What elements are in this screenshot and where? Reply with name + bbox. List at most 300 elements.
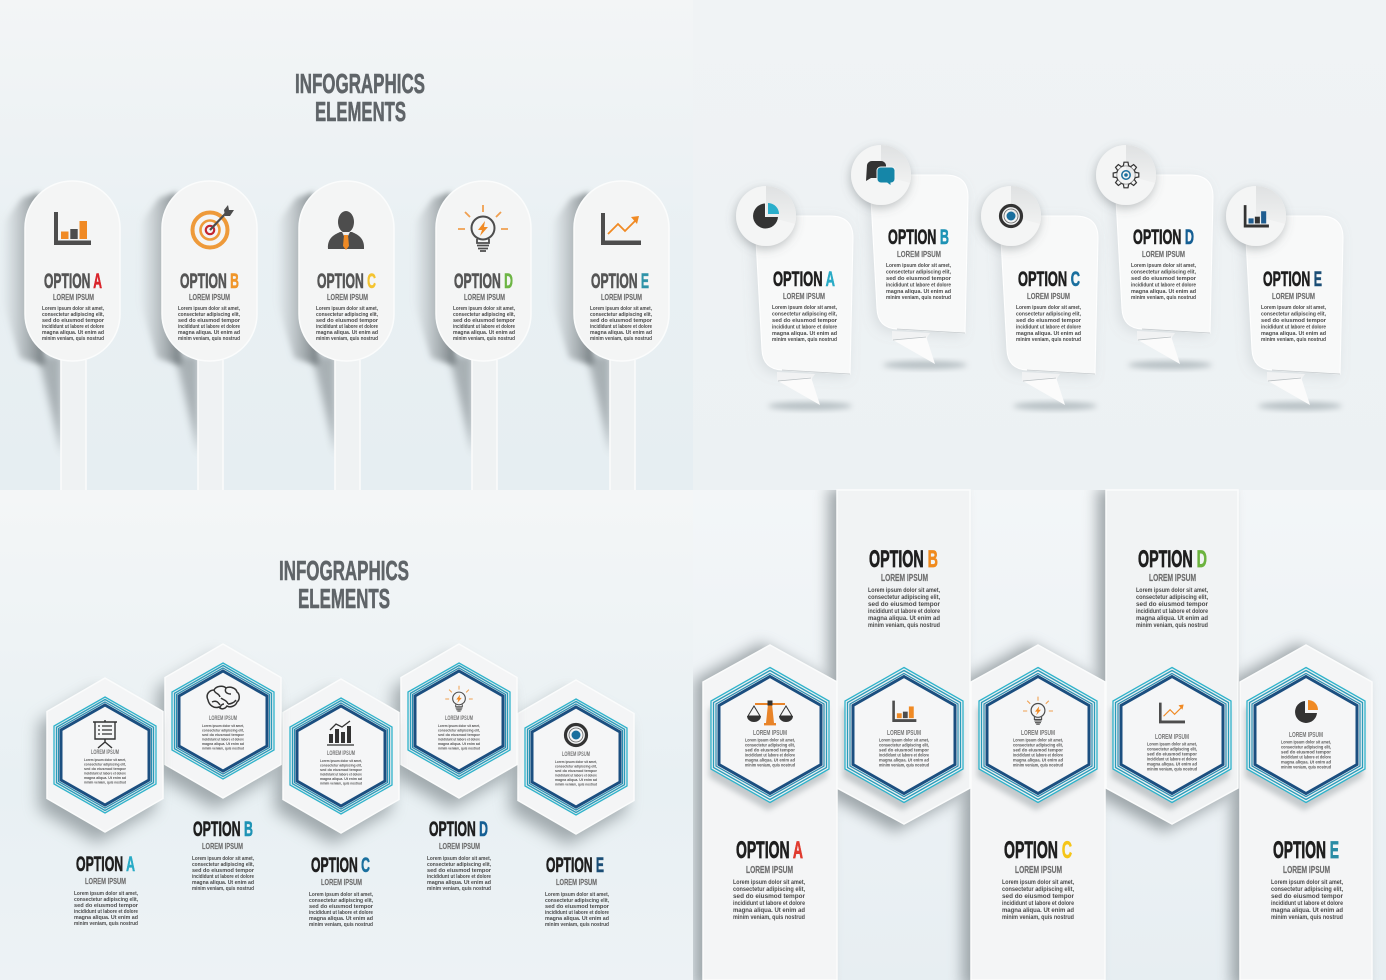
- text block: option B: LOREM IPSUM: [881, 573, 928, 584]
- card: option C: [981, 186, 1098, 410]
- text block: option C: incididunt ut labore et dolore: [1002, 900, 1074, 907]
- subheading: LOREM IPSUM: [556, 877, 597, 887]
- body text: [178, 306, 241, 342]
- inner body text: sed do eiusmod tempor: [879, 748, 929, 752]
- body text: Lorem ipsum dolor sit amet,: [427, 856, 491, 862]
- text block: option A: incididunt ut labore et dolore: [733, 900, 805, 907]
- body text: minim veniam, quis nostrud: [42, 336, 104, 342]
- body text: magna aliqua. Ut enim ad: [178, 330, 241, 336]
- card: option A: [736, 186, 853, 410]
- text block: option B: consectetur adipiscing elit,: [868, 594, 940, 601]
- inner body text: consectetur adipiscing elit,: [1281, 744, 1331, 750]
- body text: incididunt ut labore et dolore: [1016, 324, 1081, 330]
- text block: option C: sed do eiusmod tempor: [1002, 893, 1075, 900]
- hexagon: option D: [1111, 668, 1231, 810]
- text block: option A: LOREM IPSUM: [746, 865, 793, 876]
- inner label: LOREM IPSUM: [209, 715, 237, 722]
- title: ELEMENTS: [315, 96, 406, 127]
- subheading: LOREM IPSUM: [1027, 291, 1070, 301]
- body text: minim veniam, quis nostrud: [309, 922, 373, 928]
- body text: magna aliqua. Ut enim ad: [427, 880, 492, 886]
- body text: magna aliqua. Ut enim ad: [74, 915, 139, 921]
- heading: option A: OPTION A: [44, 270, 102, 293]
- pill: option C: [276, 181, 394, 490]
- panel background: [0, 0, 693, 490]
- pill: option D: [413, 181, 531, 490]
- text block: option B: OPTION B: [869, 546, 938, 573]
- body text: consectetur adipiscing elit,: [772, 312, 837, 318]
- body text: magna aliqua. Ut enim ad: [1131, 289, 1197, 295]
- icon: light bulb: [445, 686, 473, 711]
- inner body text: consectetur adipiscing elit,: [320, 762, 362, 768]
- body text: incididunt ut labore et dolore: [74, 909, 138, 915]
- body text: consectetur adipiscing elit,: [453, 312, 515, 318]
- inner body text: consectetur adipiscing elit,: [84, 762, 126, 766]
- text block: option A: Lorem ipsum dolor sit amet,: [733, 879, 805, 886]
- body text: minim veniam, quis nostrud: [545, 922, 609, 928]
- inner body text: minim veniam, quis nostrud: [555, 782, 598, 786]
- body text: incididunt ut labore et dolore: [1131, 282, 1196, 288]
- heading: option A: OPTION A: [773, 268, 835, 291]
- body text: sed do eiusmod tempor: [309, 904, 374, 910]
- icon: bar chart: [54, 212, 91, 245]
- hexagon: option E: [510, 680, 634, 928]
- inner body text: incididunt ut labore et dolore: [879, 752, 929, 758]
- heading: option C: OPTION C: [317, 270, 376, 293]
- body text: incididunt ut labore et dolore: [192, 874, 254, 880]
- icon disc: rings: [981, 186, 1041, 246]
- text block: option B: [868, 546, 941, 629]
- hexagon: option C: [275, 679, 399, 928]
- heading: option C: OPTION C: [311, 854, 370, 877]
- body text: Lorem ipsum dolor sit amet,: [772, 305, 837, 311]
- body text: magna aliqua. Ut enim ad: [316, 330, 379, 336]
- body text: Lorem ipsum dolor sit amet,: [316, 306, 378, 312]
- text block: option C: consectetur adipiscing elit,: [1002, 886, 1074, 893]
- inner body text: magna aliqua. Ut enim ad: [1013, 758, 1063, 762]
- text block: option A: magna aliqua. Ut enim ad: [733, 907, 805, 914]
- subheading: LOREM IPSUM: [439, 841, 480, 851]
- panel: top-left pills: [0, 0, 693, 490]
- pill: option B: [139, 181, 257, 490]
- heading: option B: OPTION B: [180, 270, 239, 293]
- body text: Lorem ipsum dolor sit amet,: [1261, 305, 1326, 311]
- body text: consectetur adipiscing elit,: [74, 897, 138, 903]
- body text: Lorem ipsum dolor sit amet,: [309, 892, 373, 898]
- body text: sed do eiusmod tempor: [178, 318, 241, 324]
- title: ELEMENTS: [298, 583, 390, 614]
- column shadows: [694, 488, 1365, 980]
- inner body text: minim veniam, quis nostrud: [745, 762, 795, 768]
- icon: growth chart: [1159, 703, 1185, 723]
- body text: [1131, 263, 1197, 301]
- inner body text: Lorem ipsum dolor sit amet,: [438, 723, 480, 728]
- inner label: LOREM IPSUM: [753, 728, 787, 737]
- body text: Lorem ipsum dolor sit amet,: [545, 892, 609, 898]
- panel background: [693, 490, 1386, 980]
- icon: brain: [207, 686, 239, 709]
- body text: minim veniam, quis nostrud: [74, 921, 138, 927]
- inner body text: incididunt ut labore et dolore: [84, 770, 127, 776]
- pill: option E: [551, 181, 669, 490]
- body text: consectetur adipiscing elit,: [1016, 312, 1081, 318]
- hexagon: option B: [157, 644, 281, 892]
- body text: Lorem ipsum dolor sit amet,: [42, 306, 104, 312]
- subheading: LOREM IPSUM: [464, 292, 505, 302]
- inner body text: consectetur adipiscing elit,: [879, 742, 929, 748]
- inner body text: [1013, 738, 1063, 768]
- inner body text: consectetur adipiscing elit,: [202, 728, 244, 732]
- text block: option B: Lorem ipsum dolor sit amet,: [868, 587, 940, 594]
- inner body text: [202, 723, 245, 750]
- body text: consectetur adipiscing elit,: [192, 862, 254, 868]
- inner body text: incididunt ut labore et dolore: [202, 736, 245, 742]
- inner body text: incididunt ut labore et dolore: [1281, 754, 1331, 760]
- body text: [427, 856, 492, 892]
- inner body text: consectetur adipiscing elit,: [555, 764, 597, 768]
- inner body text: incididunt ut labore et dolore: [320, 772, 363, 776]
- heading: option B: OPTION B: [193, 818, 253, 841]
- inner body text: [84, 757, 127, 784]
- subheading: LOREM IPSUM: [321, 877, 362, 887]
- inner label: LOREM IPSUM: [1021, 728, 1055, 737]
- body text: minim veniam, quis nostrud: [192, 886, 254, 892]
- text block: option D: consectetur adipiscing elit,: [1136, 594, 1208, 601]
- text block: option B: sed do eiusmod tempor: [868, 601, 941, 608]
- icon disc: gear: [1096, 145, 1156, 205]
- inner body text: incididunt ut labore et dolore: [1147, 756, 1197, 762]
- text block: option A: OPTION A: [736, 837, 803, 864]
- body text: Lorem ipsum dolor sit amet,: [74, 891, 138, 897]
- text block: option E: magna aliqua. Ut enim ad: [1271, 907, 1343, 914]
- text block: option A: minim veniam, quis nostrud: [733, 914, 805, 921]
- subheading: LOREM IPSUM: [202, 841, 243, 851]
- text block: option A: consectetur adipiscing elit,: [733, 886, 805, 893]
- body text: sed do eiusmod tempor: [427, 868, 492, 874]
- body text: sed do eiusmod tempor: [1131, 276, 1197, 282]
- column A: [703, 645, 837, 980]
- body text: sed do eiusmod tempor: [42, 318, 105, 324]
- body text: magna aliqua. Ut enim ad: [192, 880, 255, 886]
- inner label: LOREM IPSUM: [1155, 732, 1189, 741]
- body text: [590, 306, 653, 342]
- text block: option E: consectetur adipiscing elit,: [1271, 886, 1343, 893]
- body text: sed do eiusmod tempor: [590, 318, 653, 324]
- hexagon: option D: [393, 644, 517, 892]
- hexagon: option B: [843, 668, 963, 810]
- body text: minim veniam, quis nostrud: [316, 336, 378, 342]
- inner body text: consectetur adipiscing elit,: [745, 742, 795, 748]
- text block: option E: sed do eiusmod tempor: [1271, 893, 1344, 900]
- body text: minim veniam, quis nostrud: [1016, 337, 1081, 343]
- body text: incididunt ut labore et dolore: [42, 324, 104, 330]
- inner body text: sed do eiusmod tempor: [1147, 752, 1197, 756]
- inner body text: minim veniam, quis nostrud: [438, 746, 481, 750]
- body text: minim veniam, quis nostrud: [427, 886, 491, 892]
- body text: [1261, 305, 1327, 343]
- inner body text: magna aliqua. Ut enim ad: [745, 758, 795, 762]
- body text: sed do eiusmod tempor: [453, 318, 516, 324]
- icon disc: bars: [1226, 186, 1286, 246]
- body text: sed do eiusmod tempor: [886, 276, 952, 282]
- inner body text: Lorem ipsum dolor sit amet,: [879, 738, 929, 742]
- title: INFOGRAPHICS: [279, 555, 409, 586]
- title: INFOGRAPHICS: [295, 68, 425, 99]
- body text: minim veniam, quis nostrud: [886, 295, 951, 301]
- body text: magna aliqua. Ut enim ad: [1261, 331, 1327, 337]
- inner body text: incididunt ut labore et dolore: [438, 736, 481, 742]
- icon disc: chat: [851, 145, 911, 205]
- inner body text: Lorem ipsum dolor sit amet,: [84, 757, 126, 762]
- inner body text: consectetur adipiscing elit,: [438, 728, 480, 732]
- body text: minim veniam, quis nostrud: [178, 336, 240, 342]
- body text: sed do eiusmod tempor: [192, 868, 255, 874]
- panel background: [0, 490, 693, 980]
- inner body text: minim veniam, quis nostrud: [1147, 766, 1197, 772]
- body text: minim veniam, quis nostrud: [590, 336, 652, 342]
- subheading: LOREM IPSUM: [327, 292, 368, 302]
- text block: option B: magna aliqua. Ut enim ad: [868, 615, 940, 622]
- icon: bar chart: [892, 701, 916, 722]
- body text: consectetur adipiscing elit,: [427, 862, 491, 868]
- body text: incididunt ut labore et dolore: [453, 324, 515, 330]
- subheading: LOREM IPSUM: [1272, 291, 1315, 301]
- body text: incididunt ut labore et dolore: [427, 874, 491, 880]
- inner label: LOREM IPSUM: [327, 750, 355, 757]
- inner body text: sed do eiusmod tempor: [202, 732, 244, 737]
- text block: option E: LOREM IPSUM: [1283, 865, 1330, 876]
- body text: magna aliqua. Ut enim ad: [886, 289, 952, 295]
- body text: incididunt ut labore et dolore: [1261, 324, 1326, 330]
- panel background: [693, 0, 1386, 490]
- panel: bottom-left hexagons: [0, 490, 693, 980]
- body text: consectetur adipiscing elit,: [886, 270, 951, 276]
- body text: minim veniam, quis nostrud: [1261, 337, 1326, 343]
- inner body text: Lorem ipsum dolor sit amet,: [1281, 740, 1331, 744]
- body text: [545, 892, 610, 928]
- body text: Lorem ipsum dolor sit amet,: [590, 306, 652, 312]
- inner body text: sed do eiusmod tempor: [320, 767, 362, 772]
- text block: option D: LOREM IPSUM: [1149, 573, 1196, 584]
- icon disc: pie: [736, 186, 796, 246]
- body text: [886, 263, 952, 301]
- inner body text: minim veniam, quis nostrud: [84, 780, 127, 784]
- inner body text: magna aliqua. Ut enim ad: [202, 741, 245, 746]
- body text: Lorem ipsum dolor sit amet,: [1131, 263, 1196, 269]
- body text: sed do eiusmod tempor: [1261, 318, 1327, 324]
- text block: option E: Lorem ipsum dolor sit amet,: [1271, 879, 1343, 886]
- inner body text: [745, 738, 795, 768]
- body text: incididunt ut labore et dolore: [590, 324, 652, 330]
- subheading: LOREM IPSUM: [189, 292, 230, 302]
- text block: option D: minim veniam, quis nostrud: [1136, 622, 1208, 629]
- body text: magna aliqua. Ut enim ad: [42, 330, 105, 336]
- text block: option C: Lorem ipsum dolor sit amet,: [1002, 879, 1074, 886]
- inner body text: sed do eiusmod tempor: [438, 732, 480, 737]
- inner body text: minim veniam, quis nostrud: [1281, 764, 1331, 770]
- column B: [837, 490, 970, 824]
- inner body text: [438, 723, 481, 750]
- card: option B: [851, 145, 968, 369]
- body text: sed do eiusmod tempor: [316, 318, 379, 324]
- body text: incididunt ut labore et dolore: [309, 910, 373, 916]
- column C: [971, 645, 1105, 980]
- card: option D: [1096, 145, 1213, 369]
- inner body text: magna aliqua. Ut enim ad: [438, 741, 481, 746]
- card: option E: [1226, 186, 1343, 410]
- icon: statistics: [327, 721, 354, 745]
- body text: sed do eiusmod tempor: [74, 903, 139, 909]
- text block: option C: LOREM IPSUM: [1015, 865, 1062, 876]
- heading: option D: OPTION D: [1133, 226, 1194, 249]
- text block: option C: minim veniam, quis nostrud: [1002, 914, 1074, 921]
- text block: option E: [1271, 837, 1344, 921]
- body text: consectetur adipiscing elit,: [178, 312, 240, 318]
- icon: presentation board: [93, 720, 117, 748]
- inner body text: minim veniam, quis nostrud: [1013, 762, 1063, 768]
- hexagon: option E: [1245, 668, 1365, 810]
- text block: option E: OPTION E: [1273, 837, 1339, 864]
- heading: option E: OPTION E: [546, 854, 604, 877]
- body text: consectetur adipiscing elit,: [1261, 312, 1326, 318]
- text block: option C: magna aliqua. Ut enim ad: [1002, 907, 1074, 914]
- body text: minim veniam, quis nostrud: [453, 336, 515, 342]
- text block: option C: [1002, 837, 1075, 921]
- body text: magna aliqua. Ut enim ad: [309, 916, 374, 922]
- body text: magna aliqua. Ut enim ad: [772, 331, 838, 337]
- body text: incididunt ut labore et dolore: [178, 324, 240, 330]
- body text: [42, 306, 105, 342]
- text block: option B: incididunt ut labore et dolore: [868, 608, 940, 615]
- inner body text: consectetur adipiscing elit,: [1013, 742, 1063, 748]
- body text: incididunt ut labore et dolore: [316, 324, 378, 330]
- body text: [74, 891, 139, 927]
- body text: incididunt ut labore et dolore: [772, 324, 837, 330]
- pill: option A: [2, 181, 120, 490]
- body text: magna aliqua. Ut enim ad: [590, 330, 653, 336]
- body text: consectetur adipiscing elit,: [316, 312, 378, 318]
- subheading: LOREM IPSUM: [53, 292, 94, 302]
- subheading: LOREM IPSUM: [85, 876, 126, 886]
- inner body text: incididunt ut labore et dolore: [745, 752, 795, 758]
- icon: target: [566, 724, 586, 746]
- panel: bottom-right columns: [693, 488, 1386, 980]
- body text: Lorem ipsum dolor sit amet,: [178, 306, 240, 312]
- body text: [1016, 305, 1082, 343]
- inner body text: Lorem ipsum dolor sit amet,: [1147, 742, 1197, 746]
- heading: option D: OPTION D: [429, 818, 488, 841]
- hexagon: option A: [39, 678, 163, 927]
- inner label: LOREM IPSUM: [445, 715, 473, 722]
- body text: sed do eiusmod tempor: [1016, 318, 1082, 324]
- panel: top-right speech cards: [693, 0, 1386, 490]
- hexagon: option A: [709, 668, 829, 810]
- icon: pie: [1295, 700, 1318, 723]
- text block: option D: Lorem ipsum dolor sit amet,: [1136, 587, 1208, 594]
- inner body text: magna aliqua. Ut enim ad: [1281, 760, 1331, 764]
- inner body text: minim veniam, quis nostrud: [202, 746, 245, 750]
- text block: option D: sed do eiusmod tempor: [1136, 601, 1209, 608]
- body text: consectetur adipiscing elit,: [1131, 270, 1196, 276]
- column D: [1106, 490, 1238, 824]
- heading: option B: OPTION B: [888, 226, 949, 249]
- inner body text: magna aliqua. Ut enim ad: [1147, 762, 1197, 766]
- inner body text: minim veniam, quis nostrud: [879, 762, 929, 768]
- inner label: LOREM IPSUM: [562, 751, 590, 758]
- inner body text: magna aliqua. Ut enim ad: [879, 758, 929, 762]
- inner body text: consectetur adipiscing elit,: [1147, 746, 1197, 752]
- body text: [453, 306, 516, 342]
- body text: consectetur adipiscing elit,: [309, 898, 373, 904]
- inner body text: minim veniam, quis nostrud: [320, 780, 363, 786]
- inner body text: sed do eiusmod tempor: [1013, 748, 1063, 752]
- text block: option C: OPTION C: [1004, 837, 1072, 864]
- body text: minim veniam, quis nostrud: [1131, 295, 1196, 301]
- column E: [1240, 645, 1372, 980]
- subheading: LOREM IPSUM: [1142, 249, 1185, 259]
- body text: magna aliqua. Ut enim ad: [1016, 331, 1082, 337]
- text block: option D: [1136, 546, 1209, 629]
- inner body text: Lorem ipsum dolor sit amet,: [555, 759, 597, 764]
- inner label: LOREM IPSUM: [1289, 730, 1323, 739]
- body text: Lorem ipsum dolor sit amet,: [1016, 305, 1081, 311]
- inner body text: incididunt ut labore et dolore: [1013, 752, 1063, 758]
- icon: scales: [747, 700, 793, 725]
- inner body text: sed do eiusmod tempor: [555, 768, 597, 773]
- inner body text: Lorem ipsum dolor sit amet,: [745, 738, 795, 742]
- inner body text: sed do eiusmod tempor: [1281, 750, 1331, 754]
- subheading: LOREM IPSUM: [897, 249, 941, 259]
- body text: minim veniam, quis nostrud: [772, 337, 837, 343]
- text block: option E: minim veniam, quis nostrud: [1271, 914, 1343, 921]
- text block: option B: minim veniam, quis nostrud: [868, 622, 940, 629]
- body text: incididunt ut labore et dolore: [886, 282, 951, 288]
- inner body text: [320, 758, 363, 786]
- body text: [316, 306, 379, 342]
- body text: incididunt ut labore et dolore: [545, 910, 609, 916]
- inner body text: Lorem ipsum dolor sit amet,: [1013, 738, 1063, 742]
- icon: target: [192, 205, 234, 248]
- text block: option E: incididunt ut labore et dolore: [1271, 900, 1343, 907]
- body text: [192, 856, 255, 892]
- icon: businessman: [328, 211, 364, 250]
- body text: Lorem ipsum dolor sit amet,: [453, 306, 515, 312]
- body text: magna aliqua. Ut enim ad: [545, 916, 610, 922]
- body text: sed do eiusmod tempor: [772, 318, 838, 324]
- text block: option D: magna aliqua. Ut enim ad: [1136, 615, 1208, 622]
- inner body text: sed do eiusmod tempor: [84, 766, 126, 771]
- text block: option D: OPTION D: [1138, 546, 1207, 573]
- heading: option E: OPTION E: [591, 270, 649, 293]
- icon: growth chart: [601, 213, 641, 245]
- body text: consectetur adipiscing elit,: [42, 312, 104, 318]
- body text: Lorem ipsum dolor sit amet,: [886, 263, 951, 269]
- body text: [309, 892, 374, 928]
- inner body text: sed do eiusmod tempor: [745, 748, 795, 752]
- inner body text: Lorem ipsum dolor sit amet,: [320, 758, 362, 763]
- inner label: LOREM IPSUM: [887, 728, 921, 737]
- inner body text: magna aliqua. Ut enim ad: [555, 777, 598, 782]
- title: [279, 555, 409, 614]
- body text: [772, 305, 838, 343]
- subheading: LOREM IPSUM: [783, 291, 825, 301]
- hexagon: option C: [977, 668, 1097, 810]
- heading: option D: OPTION D: [454, 270, 513, 293]
- body text: magna aliqua. Ut enim ad: [453, 330, 516, 336]
- inner body text: [1147, 742, 1197, 772]
- inner body text: magna aliqua. Ut enim ad: [84, 775, 127, 780]
- text block: option A: [733, 837, 806, 921]
